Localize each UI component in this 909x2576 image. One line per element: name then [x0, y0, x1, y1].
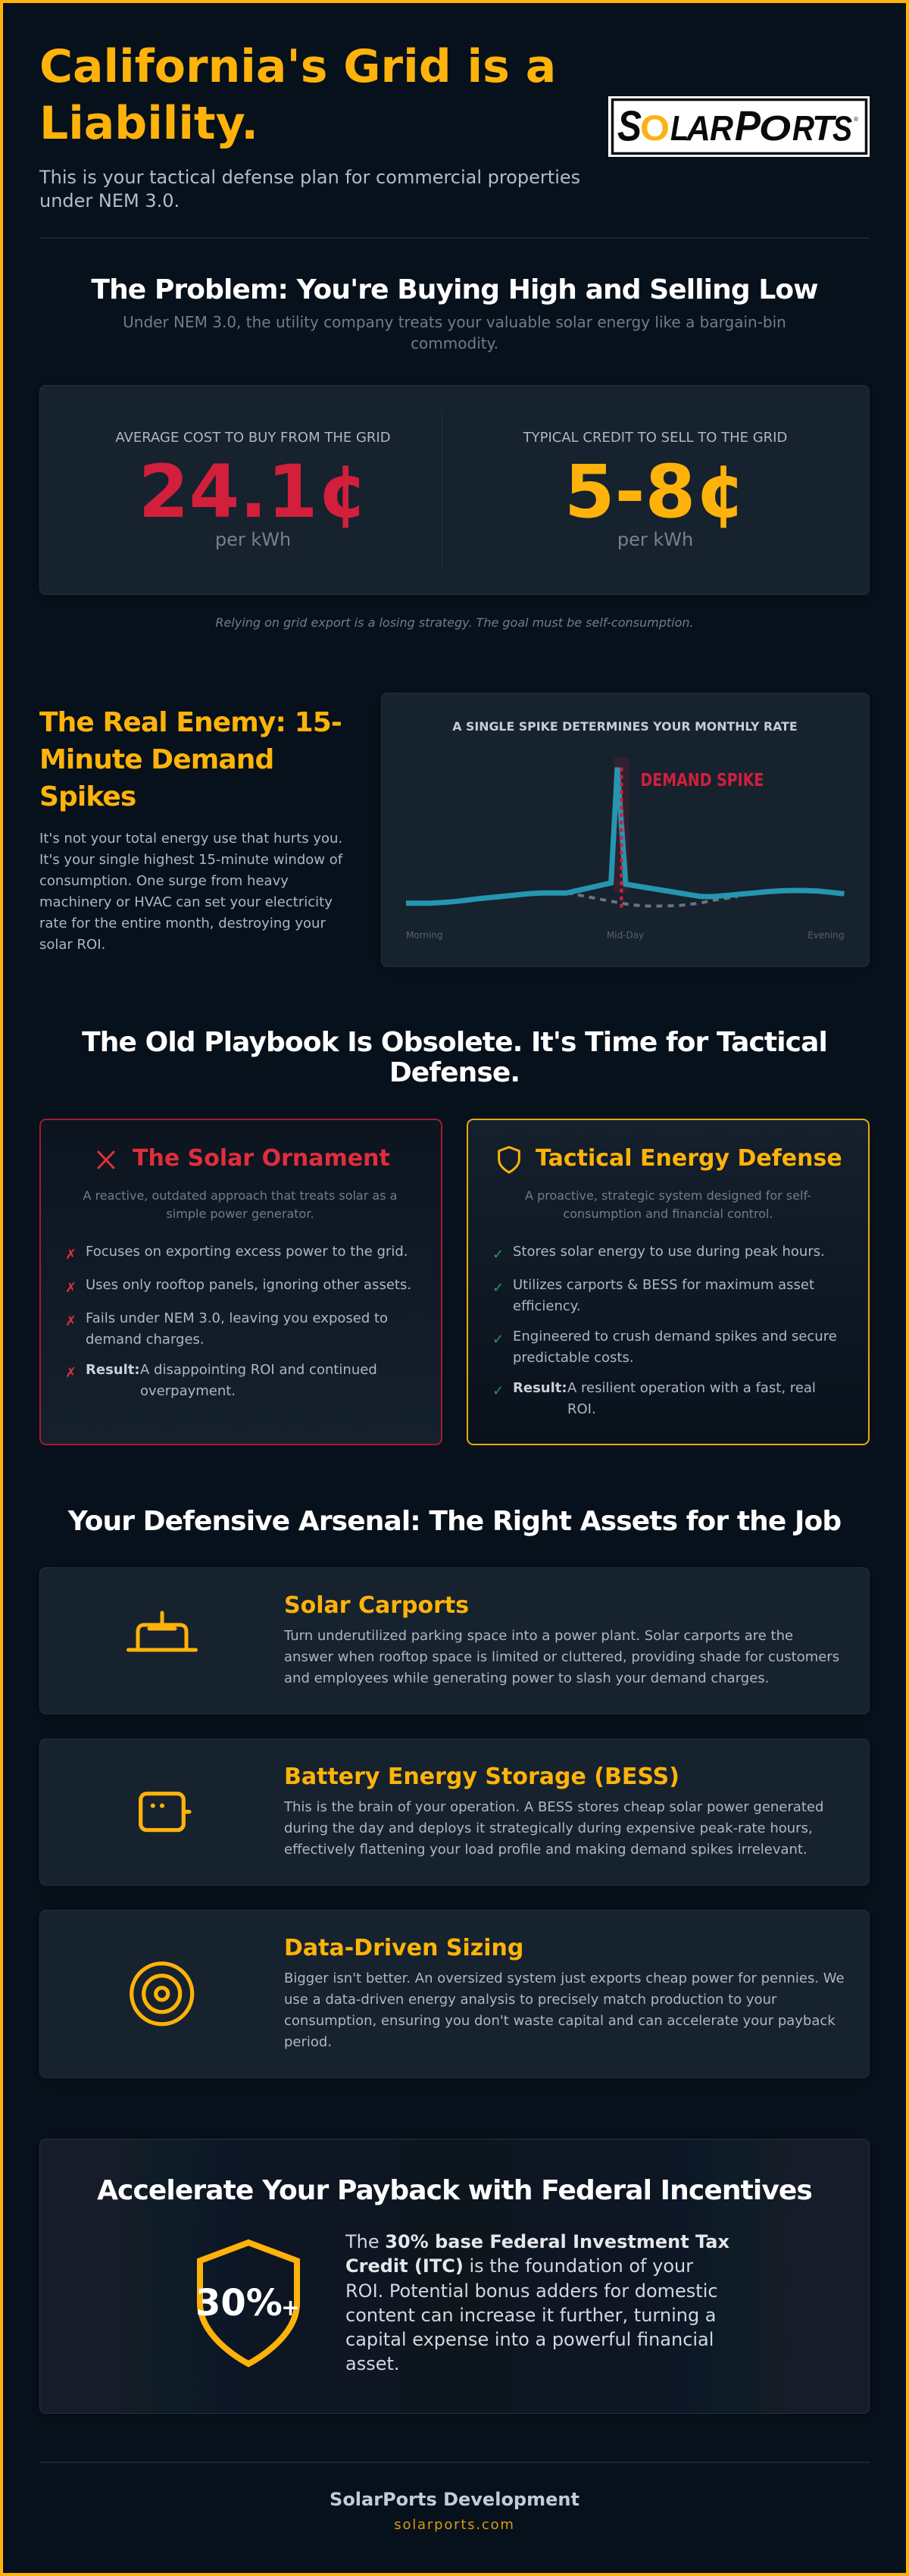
- asset description: Turn underutilized parking space into a power plant. Solar carports are the: [283, 1628, 793, 1644]
- text: the real enemy: [39, 831, 343, 953]
- heading: the real enemy: Spikes: [39, 781, 136, 812]
- list: defense benefits: ✓: [492, 1247, 504, 1263]
- text: ITC explanation: [345, 2231, 729, 2374]
- axis labels: Evening: [807, 930, 844, 941]
- text: ITC explanation: capital expense into a powerful financial: [345, 2329, 714, 2350]
- list: defense benefits: ROI.: [567, 1401, 596, 1417]
- card description: consumption and financial control.: [563, 1207, 773, 1221]
- asset description: period.: [284, 2034, 332, 2050]
- text: the real enemy: solar ROI.: [39, 937, 105, 953]
- section intro: the problem: commodity.: [411, 334, 498, 352]
- list: defense benefits: ✓: [492, 1383, 504, 1399]
- stat: cost to buy: [115, 430, 391, 550]
- icon: target: [132, 1964, 192, 2024]
- section heading: the problem: The Problem: You're Buying High and Selling Low: [91, 274, 818, 305]
- text: the real enemy: It's your single highest 15-minute window of: [39, 852, 343, 868]
- title: [39, 40, 556, 150]
- list: defense benefits: Result:: [513, 1380, 567, 1396]
- icon: shield: [499, 1147, 519, 1172]
- footer: [330, 2489, 579, 2533]
- list: ornament failings: A disappointing ROI and continued: [140, 1362, 377, 1378]
- logo: SolarPorts: [608, 96, 870, 157]
- logo: SolarPorts: S: [832, 109, 852, 149]
- asset description: use a data-driven energy analysis to precisely match production to your: [284, 1992, 777, 2008]
- logo: SolarPorts: R: [710, 108, 733, 148]
- section intro: the problem: Under NEM 3.0, the utility company treats your valuable solar energy like a bargain-bin: [123, 313, 786, 331]
- list: ornament failings: Uses only rooftop panels, ignoring other assets.: [86, 1277, 411, 1293]
- stat: credit to sell: [523, 430, 787, 550]
- text: the real enemy: rate for the entire month, destroying your: [39, 916, 326, 931]
- card description: simple power generator.: [166, 1207, 314, 1221]
- icon: shield badge: 30%: [195, 2282, 283, 2324]
- stat: cost to buy: AVERAGE COST TO BUY FROM THE GRID: [115, 430, 391, 446]
- card heading: The Solar Ornament: [133, 1145, 390, 1172]
- asset description: [284, 1970, 845, 2050]
- asset description: answer when rooftop space is limited or cluttered, providing shade for customers: [284, 1649, 839, 1665]
- text: ITC explanation: Credit (ITC) is the foundation of your: [345, 2255, 693, 2277]
- list: ornament failings: ✗: [65, 1280, 77, 1296]
- card description: [83, 1188, 397, 1221]
- text: ITC explanation: ROI. Potential bonus adders for domestic: [345, 2280, 718, 2302]
- subtitle: [39, 167, 580, 211]
- list: defense benefits: ✓: [492, 1280, 504, 1296]
- heading: old playbook: The Old Playbook Is Obsolete. It's Time for Tactical: [82, 1027, 827, 1058]
- asset heading: Solar Carports: [284, 1592, 469, 1619]
- logo: SolarPorts: A: [686, 108, 711, 148]
- heading: the real enemy: Minute Demand: [39, 744, 273, 775]
- list: defense benefits: Engineered to crush demand spikes and secure: [513, 1329, 837, 1344]
- list: ornament failings: ✗: [65, 1313, 77, 1329]
- subtitle: This is your tactical defense plan for commercial properties: [39, 167, 580, 188]
- list: defense benefits: Utilizes carports & BESS for maximum asset: [513, 1277, 814, 1293]
- chart title: A SINGLE SPIKE DETERMINES YOUR MONTHLY RATE: [452, 719, 798, 734]
- list: ornament failings: ✗: [65, 1247, 77, 1263]
- stat: credit to sell: per kWh: [617, 529, 693, 550]
- asset description: during the day and deploys it strategically during expensive peak-rate hours,: [284, 1820, 813, 1836]
- axis labels: Mid-Day: [607, 930, 644, 941]
- panel: data-driven sizing: [39, 1910, 870, 2078]
- list: ornament failings: Result:: [86, 1362, 140, 1378]
- heading: defensive arsenal: Your Defensive Arsenal: The Right Assets for the Job: [67, 1506, 841, 1537]
- list: ornament failings: Focuses on exporting excess power to the grid.: [86, 1244, 408, 1260]
- text: ITC explanation: asset.: [345, 2353, 400, 2374]
- list: defense benefits: predictable costs.: [513, 1350, 634, 1366]
- card description: A reactive, outdated approach that treats solar as a: [83, 1188, 397, 1203]
- logo: SolarPorts: O: [640, 108, 670, 148]
- list: ornament failings: ✗: [65, 1365, 77, 1381]
- list: defense benefits: A resilient operation with a fast, real: [567, 1380, 816, 1396]
- list: defense benefits: ✓: [492, 1332, 504, 1347]
- panel: federal incentives: [39, 2139, 870, 2413]
- asset description: consumption, ensuring you don't waste capital and can accelerate your payback: [284, 2013, 836, 2029]
- asset description: [283, 1628, 839, 1686]
- subtitle: under NEM 3.0.: [39, 190, 180, 211]
- list: ornament failings: [65, 1244, 411, 1399]
- heading: the real enemy: The Real Enemy: 15-: [39, 707, 342, 738]
- logo: SolarPorts: O: [759, 108, 791, 148]
- logo: SolarPorts: R: [792, 108, 814, 148]
- axis labels: [406, 930, 844, 941]
- heading: old playbook: [82, 1027, 827, 1088]
- title: Liability.: [39, 97, 258, 150]
- card description: [525, 1188, 811, 1221]
- logo: SolarPorts: S: [617, 102, 642, 150]
- panel: tactical energy defense: [467, 1119, 869, 1445]
- footer: SolarPorts Development: [330, 2489, 579, 2510]
- panel: demand spike chart: [382, 693, 870, 967]
- heading: Accelerate Your Payback with Federal Incentives: [97, 2175, 812, 2206]
- list: ornament failings: overpayment.: [140, 1383, 236, 1399]
- list: defense benefits: [492, 1244, 837, 1417]
- panel: solar carports: [39, 1567, 870, 1714]
- footer: solarports.com: [394, 2517, 515, 2533]
- stat: credit to sell: TYPICAL CREDIT TO SELL TO THE GRID: [523, 430, 787, 446]
- logo: SolarPorts: L: [670, 108, 689, 148]
- text: the real enemy: consumption. One surge from heavy: [39, 873, 289, 889]
- list: defense benefits: Stores solar energy to use during peak hours.: [513, 1244, 825, 1260]
- stat: cost to buy: per kWh: [215, 529, 291, 550]
- section intro: the problem: [123, 313, 786, 352]
- text: ITC explanation: content can increase it further, turning a: [345, 2305, 717, 2326]
- card heading: Tactical Energy Defense: [536, 1145, 842, 1172]
- note: self-consumption: Relying on grid export is a losing strategy. The goal must be self-consumption.: [215, 615, 694, 630]
- panel: battery energy storage: [39, 1739, 870, 1886]
- list: ornament failings: Fails under NEM 3.0, leaving you exposed to: [86, 1310, 388, 1326]
- stat: credit to sell: 5-8¢: [564, 449, 746, 534]
- asset description: effectively flattening your load profile and making demand spikes irrelevant.: [284, 1842, 807, 1858]
- icon: battery: [141, 1794, 189, 1830]
- stat: cost to buy: 24.1¢: [139, 449, 368, 534]
- icon: carport: [129, 1613, 195, 1650]
- panel: the solar ornament: [40, 1119, 442, 1445]
- asset description: Bigger isn't better. An oversized system just exports cheap power for pennies. We: [284, 1970, 845, 1986]
- heading: old playbook: Defense.: [389, 1057, 520, 1088]
- logo: SolarPorts: ®: [853, 116, 859, 123]
- text: the real enemy: machinery or HVAC can set your electricity: [39, 894, 333, 910]
- title: California's Grid is a: [39, 40, 556, 93]
- asset heading: Battery Energy Storage (BESS): [284, 1764, 679, 1790]
- text: ITC explanation: The 30% base Federal Investment Tax: [345, 2231, 729, 2252]
- asset description: [283, 1799, 823, 1858]
- icon: x: [98, 1152, 114, 1168]
- list: ornament failings: demand charges.: [86, 1332, 205, 1347]
- chart label: demand spike: DEMAND SPIKE: [641, 770, 764, 790]
- panel: buy vs sell rates: [39, 385, 870, 594]
- text: the real enemy: It's not your total energy use that hurts you.: [39, 831, 342, 847]
- axis labels: Morning: [406, 930, 443, 941]
- heading: the real enemy: [39, 707, 342, 812]
- logo: SolarPorts: T: [812, 108, 837, 148]
- asset description: and employees while generating power to slash your demand charges.: [284, 1670, 769, 1686]
- line chart: [406, 758, 844, 911]
- icon: shield badge: +: [281, 2295, 300, 2321]
- list: defense benefits: efficiency.: [513, 1298, 581, 1314]
- asset description: This is the brain of your operation. A BESS stores cheap solar power generated: [283, 1799, 823, 1815]
- icon: shield badge: [195, 2243, 300, 2364]
- logo: SolarPorts: P: [735, 102, 761, 149]
- asset heading: Data-Driven Sizing: [284, 1935, 523, 1961]
- card description: A proactive, strategic system designed for self-: [525, 1188, 811, 1203]
